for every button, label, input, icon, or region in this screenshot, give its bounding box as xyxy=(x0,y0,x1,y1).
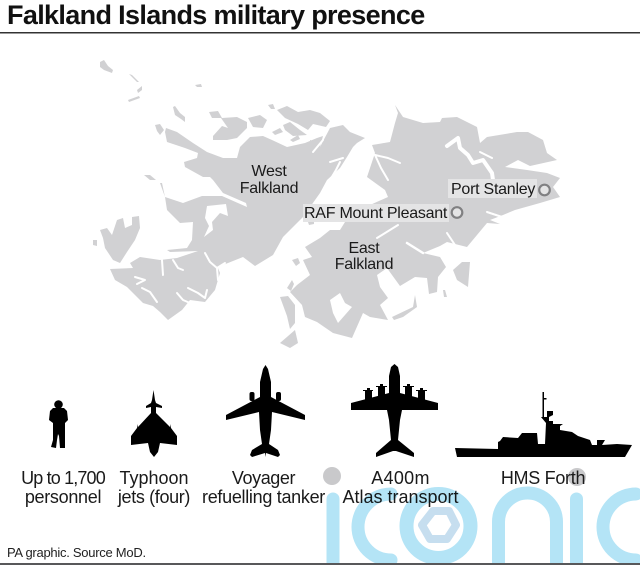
caption: personnel: personnel xyxy=(25,487,101,507)
West Falkland label: Falkland xyxy=(240,180,298,197)
caption: A400m xyxy=(342,468,459,507)
Lafonia inlet xyxy=(330,293,352,323)
East Falkland label: Falkland xyxy=(335,256,393,273)
decorative grey dot left xyxy=(323,467,341,485)
source note: PA graphic. Source MoD. xyxy=(7,545,146,560)
icon: Voyager tanker xyxy=(226,365,305,457)
location: RAF Mount Pleasant: RAF Mount Pleasant xyxy=(304,205,448,222)
East Falkland label: East xyxy=(348,240,380,257)
caption: Voyager: Voyager xyxy=(232,468,296,488)
watermark: ICONIC xyxy=(333,493,636,565)
East Falkland inlets xyxy=(375,138,505,253)
grey dot right xyxy=(568,468,586,486)
caption: Voyager: refuelling tanker xyxy=(202,487,325,507)
icon: A400m transport xyxy=(351,364,438,457)
caption: HMS Forth: HMS Forth xyxy=(501,468,585,488)
caption: Typhoon xyxy=(117,468,190,507)
icon: Typhoon jet xyxy=(131,390,177,457)
icon: HMS Forth ship xyxy=(455,392,632,457)
West Falkland landmass xyxy=(93,60,365,320)
location: Port Stanley: Port Stanley xyxy=(451,181,535,198)
caption: Typhoon: Typhoon xyxy=(119,468,189,488)
icon: soldier xyxy=(49,400,68,448)
West Falkland label xyxy=(240,163,298,197)
East Falkland landmass xyxy=(280,105,560,348)
caption: Voyager xyxy=(202,468,325,507)
West Falkland inlets xyxy=(135,140,343,303)
West Falkland label: West xyxy=(251,163,287,180)
East Falkland label xyxy=(335,240,393,273)
caption: Typhoon: jets (four) xyxy=(117,487,190,507)
caption: A400m: A400m xyxy=(371,468,430,488)
caption: personnel: Up to 1,700 xyxy=(21,468,106,488)
caption: personnel xyxy=(21,468,106,507)
caption: A400m: Atlas transport xyxy=(342,487,459,507)
title: Falkland Islands military presence xyxy=(7,0,425,30)
map: Falkland Islands xyxy=(93,60,560,348)
